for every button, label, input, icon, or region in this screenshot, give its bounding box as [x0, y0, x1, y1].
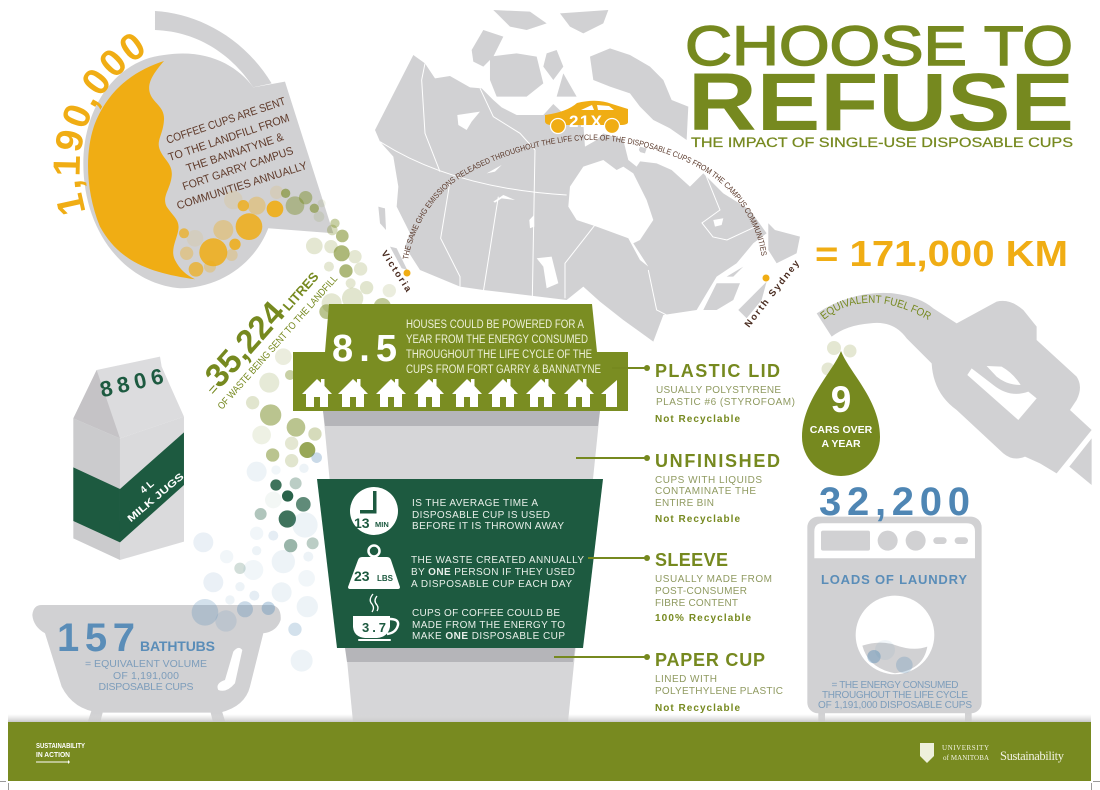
icon row: houses	[302, 379, 617, 407]
stat: 157 bathtubs: BATHTUBS	[140, 638, 215, 654]
stat: 157 bathtubs	[57, 616, 215, 693]
icon: coffee 3.7	[353, 594, 398, 641]
houses caption: THROUGHOUT THE LIFE CYCLE OF THE	[406, 349, 592, 361]
icon: fuel drop with 9 cars: CARS OVER	[810, 424, 873, 436]
text: laundry caption: OF 1,191,000 DISPOSABLE CUPS	[818, 700, 972, 711]
footer band	[8, 714, 1091, 781]
logo: university of manitoba sustainability: UNIVERSITY	[942, 744, 989, 752]
stat: 35,224 litres of waste: OF WASTE BEING SENT TO THE LANDFILL	[216, 273, 340, 412]
icon: weight 23 lbs: LBS	[377, 574, 394, 583]
houses stat: 8.5	[332, 328, 397, 370]
callout: unfinished: CONTAMINATE THE	[655, 486, 756, 497]
icon: clock 13 min: 13	[354, 515, 370, 531]
callout: plastic lid: PLASTIC #6 (STYROFOAM)	[656, 397, 795, 408]
arc caption: GHG emissions: THE SAME GHG EMISSIONS RELEASED THROUGHOUT THE LIFE CYCLE OF THE DISPOSABLE CUPS FROM THE CAMPUS COMMUNITIES	[402, 134, 767, 259]
stat: 32,200: 32,200	[819, 480, 970, 524]
icon: clock 13 min: MIN	[375, 520, 389, 529]
title: CHOOSE TO	[685, 14, 1073, 77]
text: 23 pounds	[411, 555, 584, 590]
icon: fuel nozzle	[817, 293, 1092, 485]
jug band label	[126, 471, 187, 525]
stat: 157 bathtubs: DISPOSABLE CUPS	[98, 681, 194, 693]
text: laundry caption	[818, 572, 972, 711]
callout: paper cup: PAPER CUP	[655, 650, 765, 670]
logo: sustainability in action	[36, 741, 85, 764]
callout: plastic lid: PLASTIC LID	[655, 361, 780, 381]
callout: plastic lid	[612, 361, 795, 425]
text: coffee cups caption: FORT GARRY CAMPUS	[181, 145, 295, 193]
callout: unfinished	[576, 451, 780, 525]
text: 13 minutes: IS THE AVERAGE TIME A	[412, 498, 538, 509]
stat: 157 bathtubs: 157	[57, 616, 135, 660]
pouring coffee cup	[83, 11, 333, 288]
text: coffee cups caption: COMMUNITIES ANNUALLY	[175, 160, 309, 212]
callout: paper cup: POLYETHYLENE PLASTIC	[655, 686, 783, 697]
text: 3.7 cups: CUPS OF COFFEE COULD BE	[412, 608, 560, 619]
bathtub	[32, 599, 281, 723]
callout: sleeve	[588, 550, 772, 624]
callout: unfinished: CUPS WITH LIQUIDS	[655, 475, 762, 486]
crop marks	[0, 782, 1100, 790]
label: North Sydney: North Sydney	[743, 258, 802, 330]
stat: 157 bathtubs: OF 1,191,000	[113, 670, 179, 682]
icon: fuel drop with 9 cars	[802, 341, 880, 476]
text: coffee cups caption: COFFEE CUPS ARE SENT	[165, 96, 287, 147]
text: 23 pounds: BY ONE PERSON IF THEY USED	[411, 567, 575, 578]
title: THE IMPACT OF SINGLE-USE DISPOSABLE CUPS	[691, 135, 1073, 150]
text: 3.7 cups: MADE FROM THE ENERGY TO	[412, 620, 565, 631]
callout: plastic lid: Not Recyclable	[655, 414, 740, 425]
callout: sleeve: 100% Recyclable	[655, 613, 751, 624]
text: 23 pounds: THE WASTE CREATED ANNUALLY	[411, 555, 584, 566]
panel: plastic lid	[293, 304, 628, 411]
callout: unfinished: UNFINISHED	[655, 451, 780, 471]
callout: sleeve: POST-CONSUMER	[655, 586, 747, 597]
icon: car with 21x multiplier: 21X	[569, 112, 603, 131]
stat: 35,224 litres of waste: =35,224LITRES	[192, 257, 325, 401]
callout: paper cup: Not Recyclable	[655, 703, 740, 714]
icon: clock 13 min	[350, 487, 398, 535]
distance stat: 171,000 km: = 171,000 KM	[815, 233, 1068, 274]
logo: sustainability in action: SUSTAINABILITY	[36, 741, 85, 750]
logo: university of manitoba sustainability: of MANITOBA	[943, 754, 989, 762]
title	[685, 14, 1074, 150]
coffee cup body	[323, 411, 600, 722]
text: coffee cups caption: TO THE LANDFILL FROM	[167, 112, 291, 164]
icon: car with 21x multiplier	[545, 101, 628, 134]
icon: coffee 3.7: 3.7	[362, 620, 386, 635]
map of Canada	[375, 10, 800, 342]
jug band label: MILK JUGS	[126, 471, 187, 525]
title: REFUSE	[688, 57, 1074, 148]
houses caption: HOUSES COULD BE POWERED FOR A	[406, 319, 584, 331]
icon: weight 23 lbs	[348, 546, 400, 589]
jug count: 8806	[97, 363, 166, 402]
logo: sustainability in action: IN ACTION	[36, 750, 70, 759]
callout: paper cup: LINED WITH	[655, 674, 717, 685]
stat: 157 bathtubs: = EQUIVALENT VOLUME	[85, 658, 207, 670]
text: 13 minutes	[412, 498, 564, 532]
label: Victoria: Victoria	[378, 249, 414, 295]
bubble stream: orange and olive	[179, 186, 396, 319]
text: coffee cups caption: THE BANNATYNE &	[185, 131, 286, 175]
icon: washing machine	[807, 517, 982, 723]
icon: fuel drop with 9 cars: 9	[831, 379, 851, 420]
text: coffee cups caption	[165, 96, 309, 212]
callout: plastic lid: USUALLY POLYSTYRENE	[656, 385, 781, 396]
number: 1,190,000: 1,190,000	[54, 34, 144, 214]
houses caption	[406, 319, 601, 376]
text: 3.7 cups: MAKE ONE DISPOSABLE CUP	[412, 631, 565, 642]
callout: paper cup	[554, 650, 783, 714]
milk jug	[73, 357, 187, 560]
text: 13 minutes: BEFORE IT IS THROWN AWAY	[412, 521, 564, 532]
callout: sleeve: USUALLY MADE FROM	[655, 574, 772, 585]
logo: university of manitoba sustainability	[920, 743, 1065, 763]
text: 3.7 cups	[412, 608, 565, 642]
icon: fuel drop with 9 cars: A YEAR	[821, 438, 861, 450]
arc caption: equivalent fuel: EQUIVALENT FUEL FOR	[820, 295, 931, 320]
callout: sleeve: SLEEVE	[655, 550, 728, 570]
text: laundry caption: LOADS OF LAUNDRY	[821, 572, 967, 587]
text: 23 pounds: A DISPOSABLE CUP EACH DAY	[411, 579, 572, 590]
text: laundry caption: = THE ENERGY CONSUMED	[832, 680, 958, 691]
text: 13 minutes: DISPOSABLE CUP IS USED	[412, 510, 550, 521]
callout: unfinished: ENTIRE BIN	[655, 498, 714, 509]
text: laundry caption: THROUGHOUT THE LIFE CYCLE	[822, 690, 968, 701]
houses caption: YEAR FROM THE ENERGY CONSUMED	[406, 334, 588, 346]
callout: sleeve: FIBRE CONTENT	[655, 598, 738, 609]
houses caption: CUPS FROM FORT GARRY & BANNATYNE	[406, 364, 601, 376]
jug band label: 4 L	[138, 479, 156, 496]
logo: university of manitoba sustainability: Sustainability	[1000, 749, 1065, 763]
panel: cup sleeve	[317, 479, 603, 648]
callout: unfinished: Not Recyclable	[655, 514, 740, 525]
icon: weight 23 lbs: 23	[354, 568, 370, 584]
bubble stream: olive, green and blue	[193, 348, 322, 672]
